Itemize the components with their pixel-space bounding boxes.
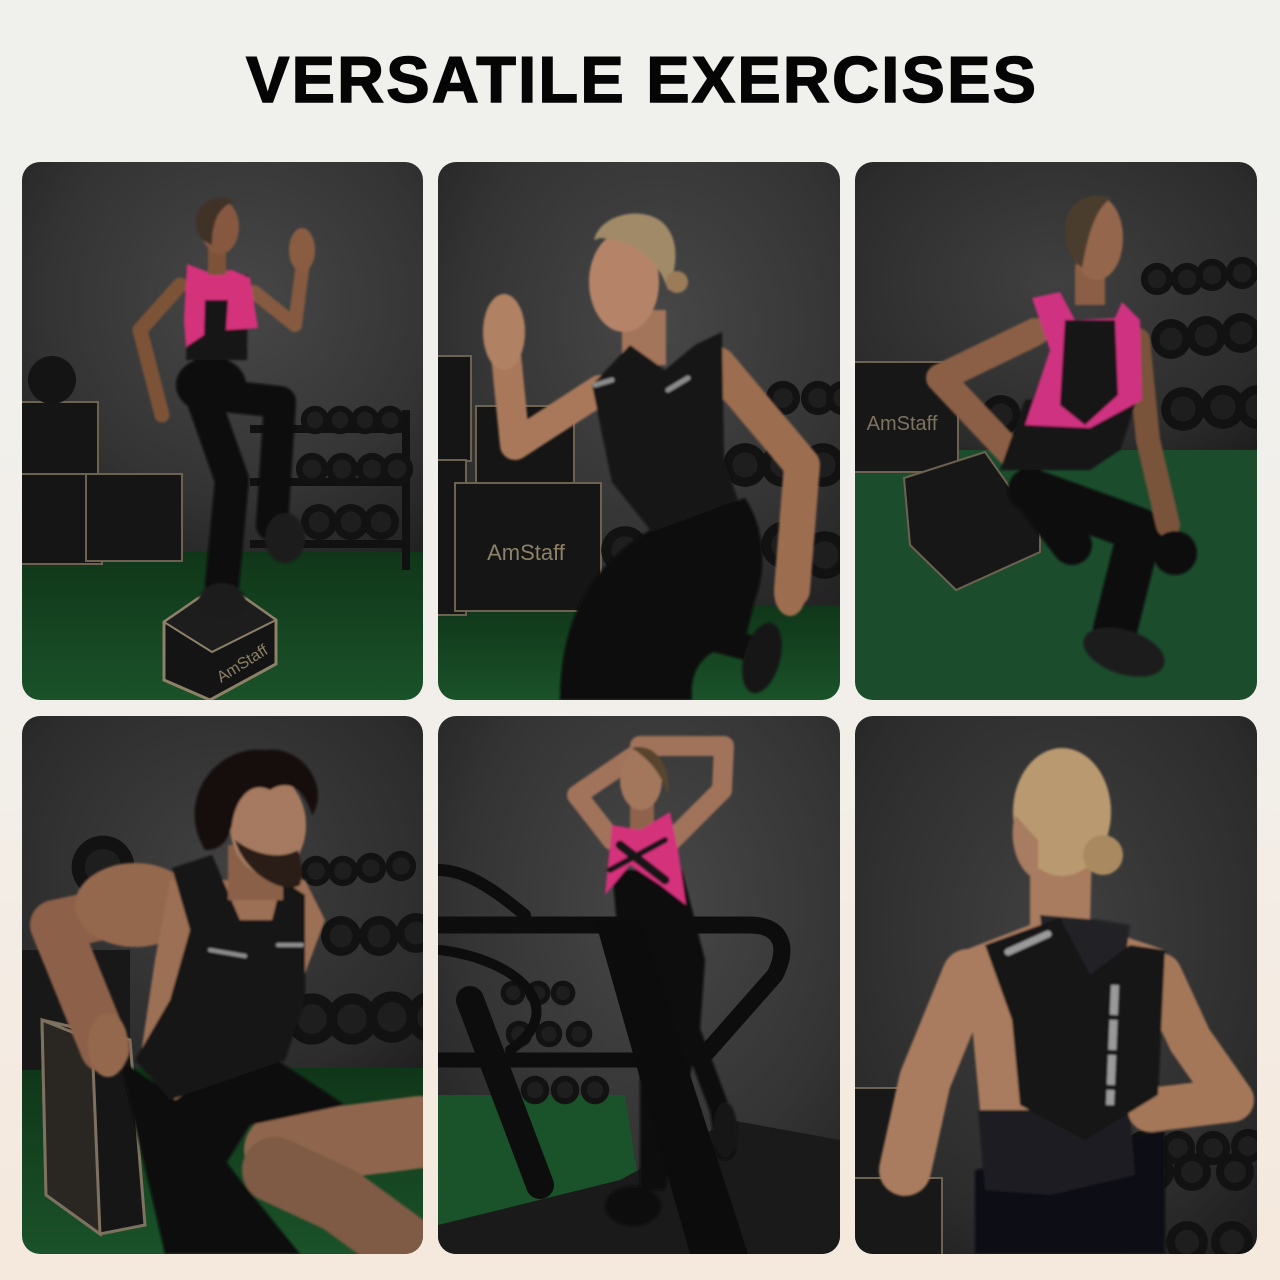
wall <box>22 716 423 1096</box>
dumbbell rack <box>1132 1129 1257 1254</box>
medicine ball <box>28 356 76 404</box>
panel: lunge with black vest <box>436 162 860 700</box>
panel: man doing box dips <box>20 716 458 1262</box>
woman lunging <box>483 214 806 700</box>
box logo: AmStaff <box>487 540 566 565</box>
wall <box>855 716 1257 1254</box>
plyo boxes <box>436 356 601 615</box>
dumbbell rack <box>501 981 609 1104</box>
woman stepping up <box>140 198 315 617</box>
panel: side lunge with dumbbell <box>852 162 1280 700</box>
floor <box>22 1068 423 1254</box>
wall <box>438 716 840 1254</box>
woman seen from behind <box>905 748 1232 1254</box>
dumbbell rack <box>981 257 1280 435</box>
treadmill frame <box>438 870 782 1254</box>
floor <box>22 552 423 700</box>
wall <box>22 162 423 562</box>
plyo box <box>852 1088 942 1258</box>
man with black vest <box>55 750 425 1262</box>
floor <box>438 605 840 700</box>
title: VERSATILE EXERCISES <box>246 43 1036 116</box>
panel: step-up on plyo box <box>20 162 423 700</box>
plyo box <box>20 950 145 1234</box>
plyo box under foot <box>164 582 276 700</box>
dumbbell rack <box>250 406 413 570</box>
wall <box>438 162 840 622</box>
dumbbell rack <box>601 381 860 579</box>
stacked plyo boxes <box>20 402 182 564</box>
floor <box>438 1095 650 1254</box>
dumbbell rack <box>72 836 458 1045</box>
wall <box>855 162 1257 462</box>
plyo boxes <box>852 362 1040 590</box>
plyo box under foot: AmStaff <box>214 642 272 686</box>
floor <box>855 450 1257 700</box>
box logo: AmStaff <box>867 413 938 435</box>
woman with pink vest <box>577 746 737 1226</box>
woman lunging with dumbbell <box>940 196 1197 686</box>
panel: vest from behind <box>852 716 1265 1263</box>
panel: sled treadmill <box>438 716 840 1254</box>
treadmill belt <box>438 1120 840 1254</box>
